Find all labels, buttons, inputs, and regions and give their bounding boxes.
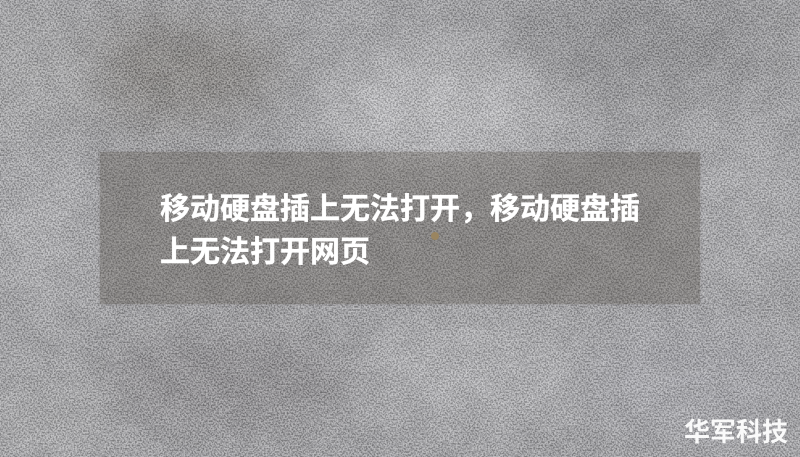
title: 移动硬盘插上无法打开，移动硬盘插上无法打开网页 xyxy=(160,193,640,269)
rust speck on the concrete xyxy=(431,232,439,240)
panel: translucent title backdrop xyxy=(100,152,700,304)
watermark: brand name: 华军科技 xyxy=(684,417,788,447)
